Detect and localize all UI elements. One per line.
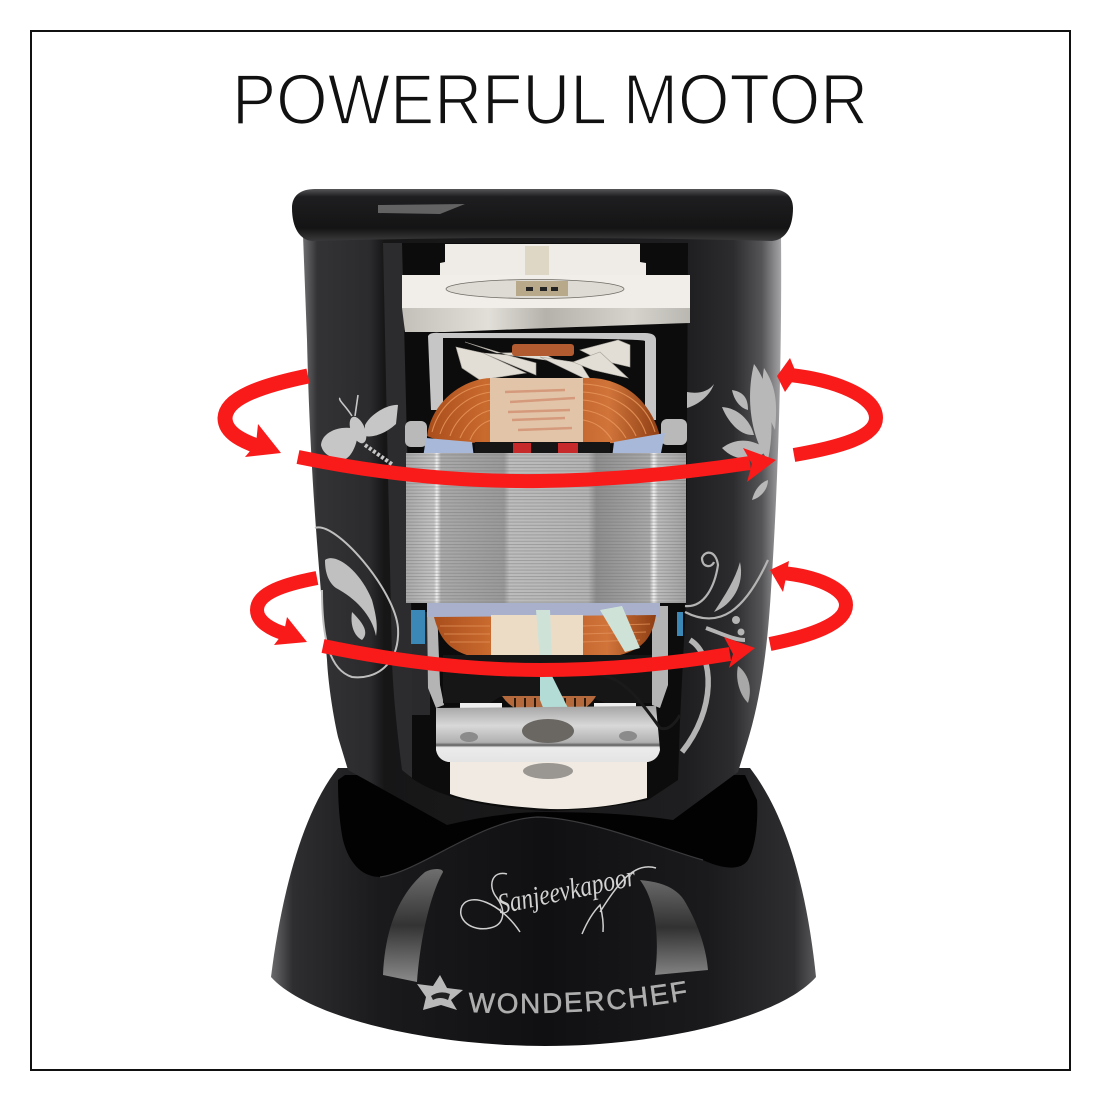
signature	[461, 860, 656, 934]
title: POWERFUL MOTOR	[232, 61, 868, 140]
blue tape right	[612, 433, 665, 458]
coupling nut	[516, 281, 568, 296]
upper copper coil	[427, 378, 660, 443]
red rotation arrows	[225, 358, 876, 670]
top bracket	[428, 333, 656, 420]
plate disc	[446, 280, 624, 298]
body decoration: paisley swirl	[315, 527, 398, 677]
red terminals	[475, 442, 610, 456]
mixer illustration	[218, 189, 883, 1046]
coupler centre	[523, 763, 573, 779]
blue wires left	[411, 610, 425, 644]
white strips behind block	[460, 703, 636, 709]
upper paper band	[490, 378, 583, 443]
side panel of cutaway	[383, 243, 412, 778]
zip tie lower	[540, 676, 570, 720]
mounting plate	[402, 275, 690, 308]
lower paper band	[491, 615, 583, 657]
base wave highlight	[380, 817, 703, 877]
white coupler foot	[450, 762, 647, 809]
mount holes	[460, 731, 637, 742]
body decoration: vine	[682, 553, 768, 752]
logo wordmark: WONDERCHEF	[468, 980, 686, 1014]
arrow loop: upper left	[225, 376, 308, 457]
lower bracket right	[652, 606, 668, 708]
zip tie vertical	[536, 610, 552, 660]
arrow band: lower main	[323, 637, 755, 670]
black wire	[602, 675, 680, 729]
logo star	[417, 975, 463, 1010]
blue tape left	[423, 438, 474, 458]
base reflection right	[640, 880, 708, 975]
fan hub copper	[512, 344, 574, 356]
arrow loop: upper right	[777, 358, 876, 455]
right screw	[661, 419, 687, 445]
left screw	[405, 421, 427, 447]
arrow loop: lower left	[257, 578, 317, 645]
body decoration: butterfly	[321, 395, 398, 465]
fan blades	[456, 340, 630, 382]
black insulation block	[443, 655, 652, 703]
blue tape lower	[427, 603, 660, 617]
plate clear edge	[402, 308, 690, 332]
jar body	[303, 235, 781, 825]
lower left panel	[412, 612, 430, 715]
lower copper coil	[434, 615, 656, 656]
lower bracket left	[427, 606, 444, 708]
cutaway opening	[398, 243, 688, 811]
signature: Sanjeevkapoor	[495, 860, 639, 921]
centre bearing	[522, 719, 574, 743]
base reflection left	[383, 869, 443, 982]
zip tie side	[600, 606, 640, 652]
base hollow	[338, 775, 757, 877]
rim	[292, 189, 793, 241]
rim highlight	[378, 204, 465, 214]
shaft reflection	[525, 246, 549, 276]
commutator	[502, 696, 596, 716]
stator	[406, 453, 686, 603]
blue wires right	[677, 612, 683, 636]
base	[271, 768, 816, 1046]
motor mount plate	[436, 706, 660, 762]
upper glass hub	[440, 244, 646, 275]
arrow loop: lower right	[770, 561, 846, 644]
arrow band: upper main	[298, 448, 776, 482]
body decoration: lotus	[687, 364, 776, 500]
motor assembly	[402, 244, 690, 809]
